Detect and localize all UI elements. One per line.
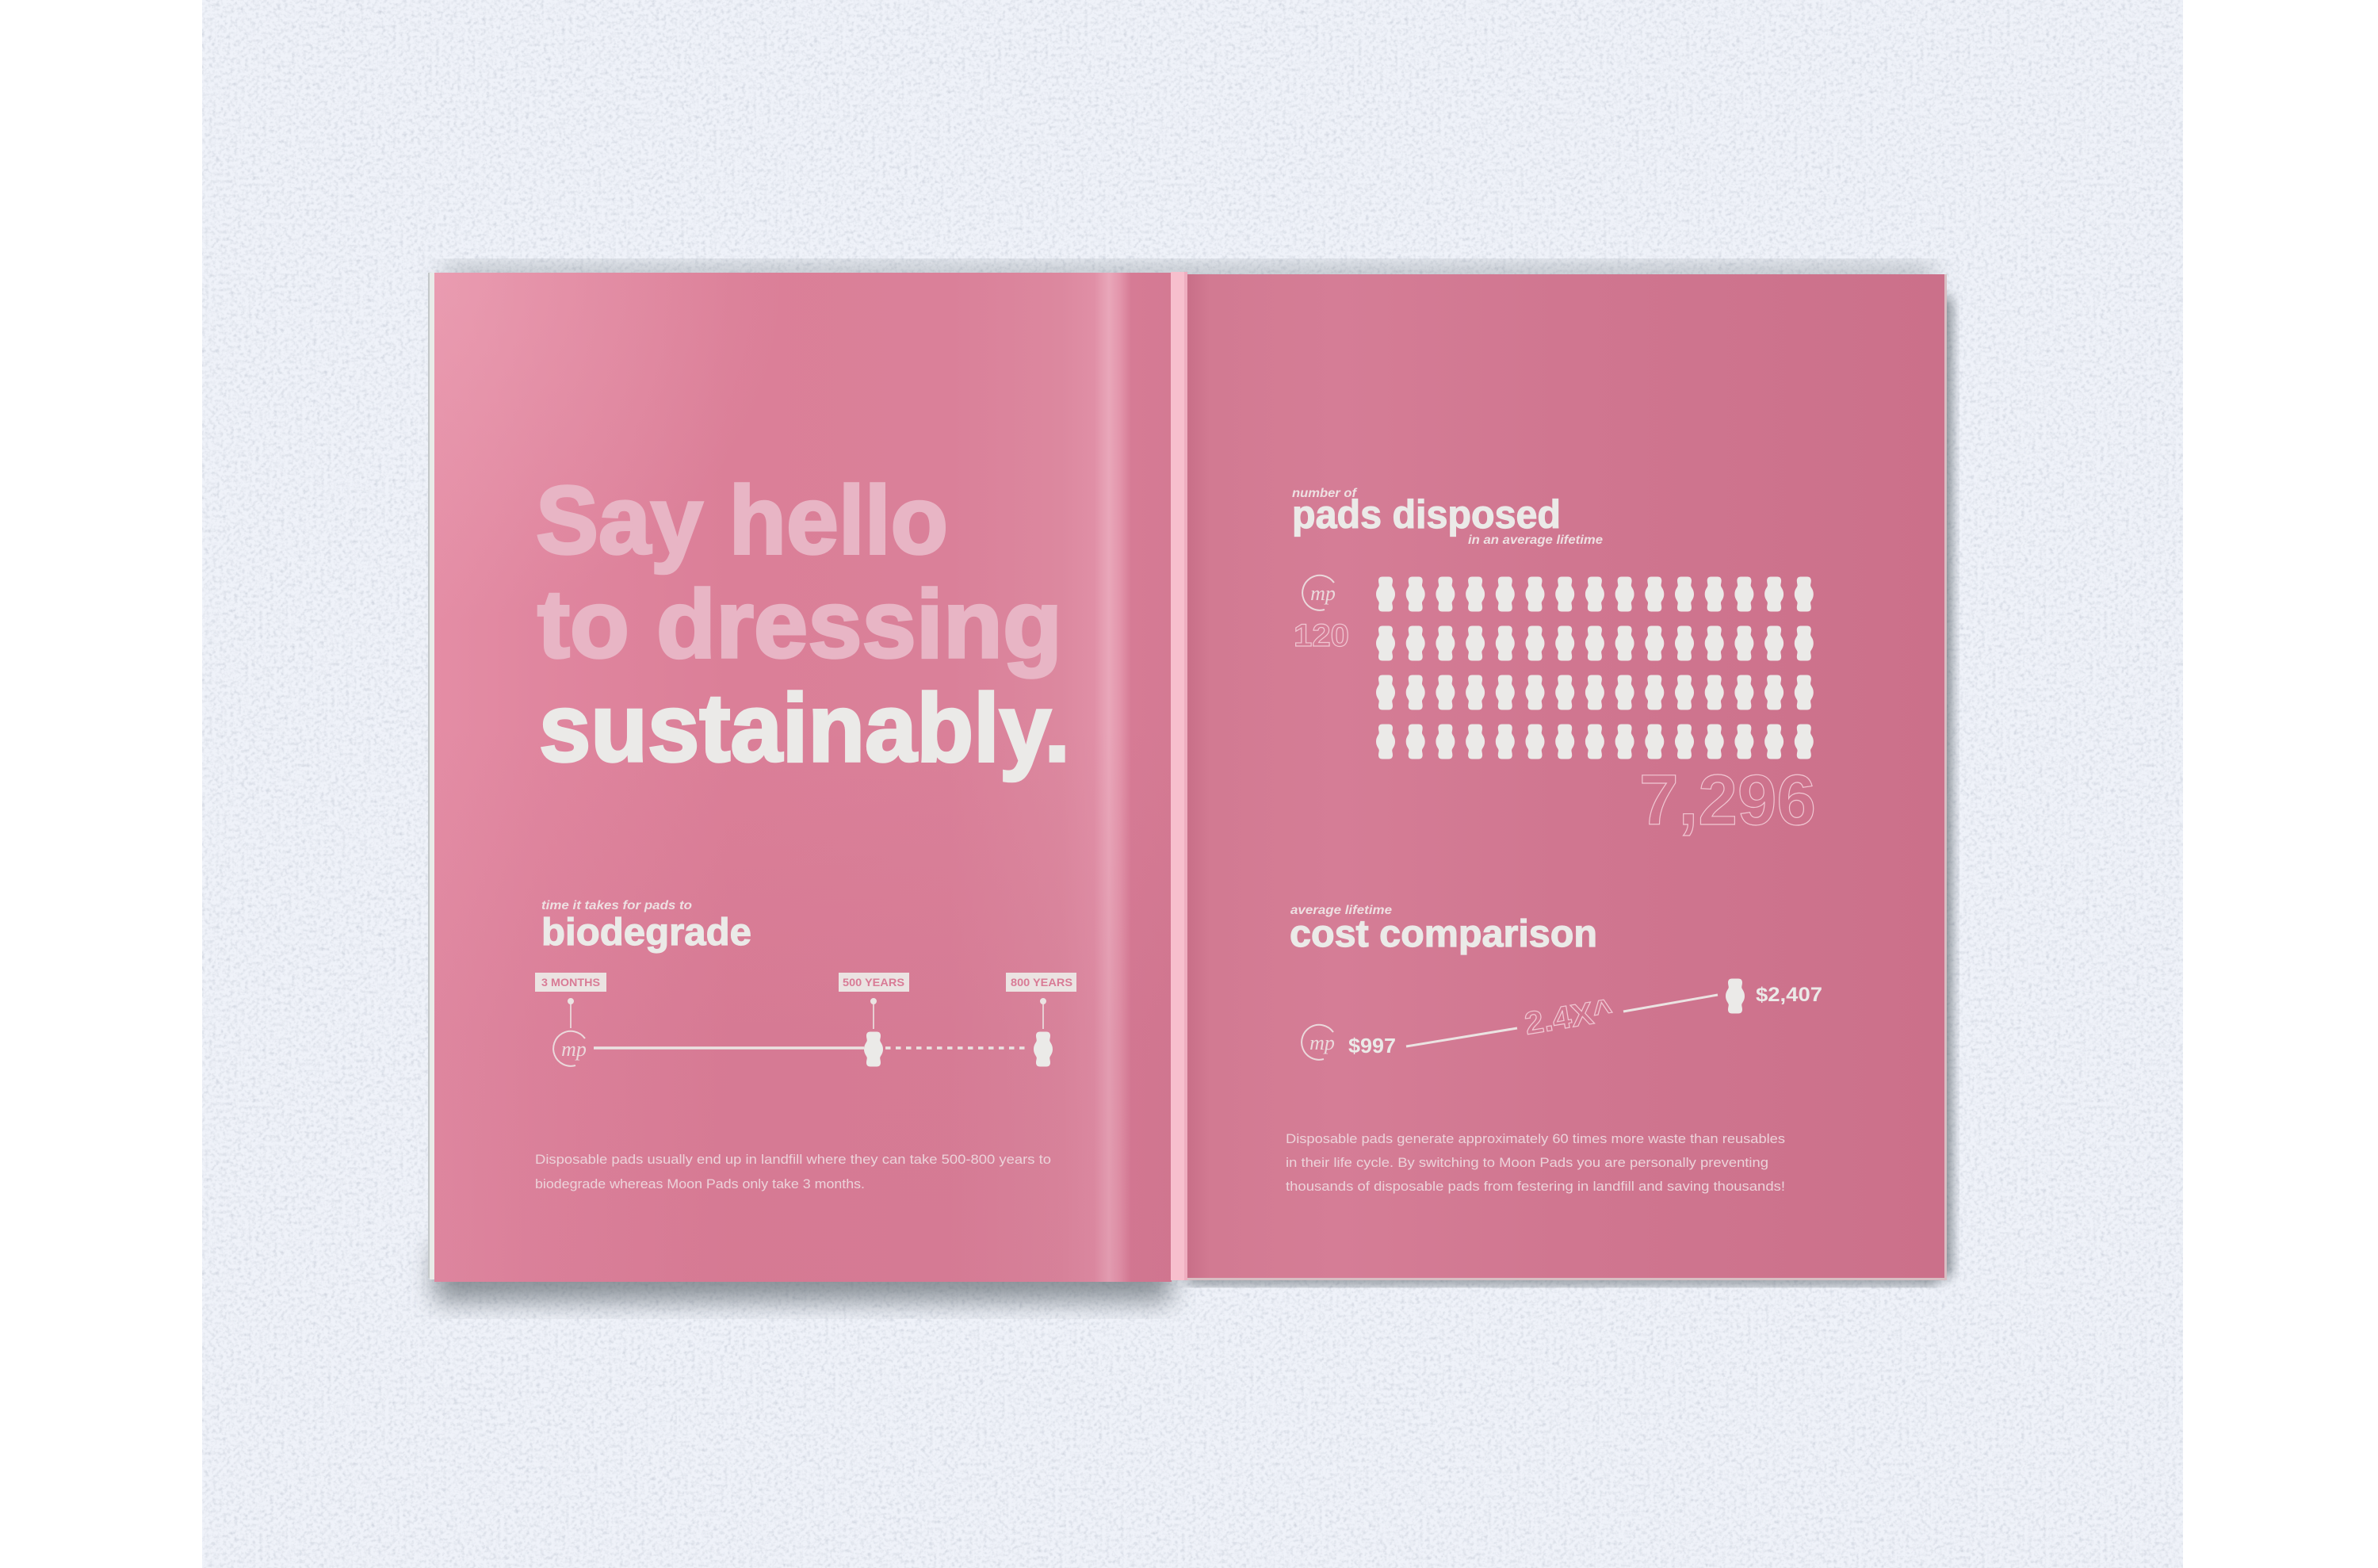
icon: mp logo: mp (561, 1038, 587, 1061)
heading: pads disposed: in an average lifetime (1468, 534, 1603, 547)
heading: pads disposed: pads disposed (1292, 492, 1561, 537)
heading: cost comparison: cost comparison (1290, 913, 1597, 955)
pictogram chart: disposable pads (1376, 577, 1814, 759)
value: $997: $997 (1348, 1034, 1396, 1057)
icon: mp logo (553, 1031, 587, 1066)
icon: pad (1726, 978, 1745, 1013)
panel: left page (428, 273, 1172, 1282)
text block: cost note (1286, 1131, 1785, 1194)
text block: biodegrade note: Disposable pads usually end up in landfill where they can take 500-800 years to (535, 1152, 1051, 1167)
icon: mp logo (1302, 1025, 1335, 1060)
tag: 800 years (1006, 973, 1076, 992)
line segment right (1623, 995, 1718, 1012)
tag: 500 years (839, 973, 909, 992)
timeline chart (535, 973, 1076, 1067)
magazine drop shadow (434, 266, 1952, 1302)
panel: right page (1187, 274, 1947, 1280)
multiplier: 2.4X: 2.4X^ (1522, 992, 1615, 1042)
line segment left (1406, 1028, 1517, 1046)
tag: 3 months (535, 973, 606, 992)
icon: pad at 800 years (1034, 1032, 1053, 1067)
timeline solid line (594, 1046, 864, 1050)
title (536, 466, 1070, 782)
number: 7,296: 7,296 (1639, 761, 1816, 840)
text block: cost note: Disposable pads generate approximately 60 times more waste than reusables (1286, 1131, 1785, 1146)
pin connectors (568, 999, 1046, 1029)
heading: biodegrade: biodegrade (541, 912, 751, 954)
title line: to dressing: to dressing (537, 570, 1062, 678)
heading: biodegrade: time it takes for pads to (541, 899, 692, 912)
title line: Say hello: Say hello (536, 466, 948, 574)
pad row 2 (1376, 626, 1814, 661)
spine (1171, 272, 1187, 1280)
value: $2,407: $2,407 (1756, 984, 1822, 1006)
tag: 800 years: 800 YEARS (1011, 976, 1072, 989)
title line: sustainably: sustainably. (539, 674, 1070, 782)
heading: pads disposed (1292, 487, 1603, 547)
pad row 1 (1376, 577, 1814, 612)
text block: biodegrade note (535, 1152, 1051, 1191)
pad row 4 (1376, 725, 1814, 759)
icon: mp logo with 120 count: 120 (1294, 618, 1349, 653)
icon: pad at 500 years (864, 1032, 883, 1067)
text block: biodegrade note: biodegrade whereas Moon Pads only take 3 months. (535, 1176, 865, 1191)
tag: 3 months: 3 MONTHS (541, 976, 600, 989)
tag: 500 years: 500 YEARS (843, 976, 904, 989)
cost comparison chart (1302, 978, 1822, 1060)
icon: mp logo with 120 count: mp (1310, 582, 1336, 605)
timeline dashed line (885, 1046, 1029, 1050)
text block: cost note: thousands of disposable pads from festering in landfill and saving thousands! (1286, 1179, 1785, 1194)
text block: cost note: in their life cycle. By switching to Moon Pads you are personally preventing (1286, 1155, 1768, 1170)
heading: cost comparison: average lifetime (1290, 904, 1392, 917)
pad row 3 (1376, 675, 1814, 710)
icon: mp logo: mp (1309, 1031, 1335, 1054)
icon: mp logo with 120 count (1294, 576, 1349, 653)
heading: pads disposed: number of (1292, 487, 1358, 500)
